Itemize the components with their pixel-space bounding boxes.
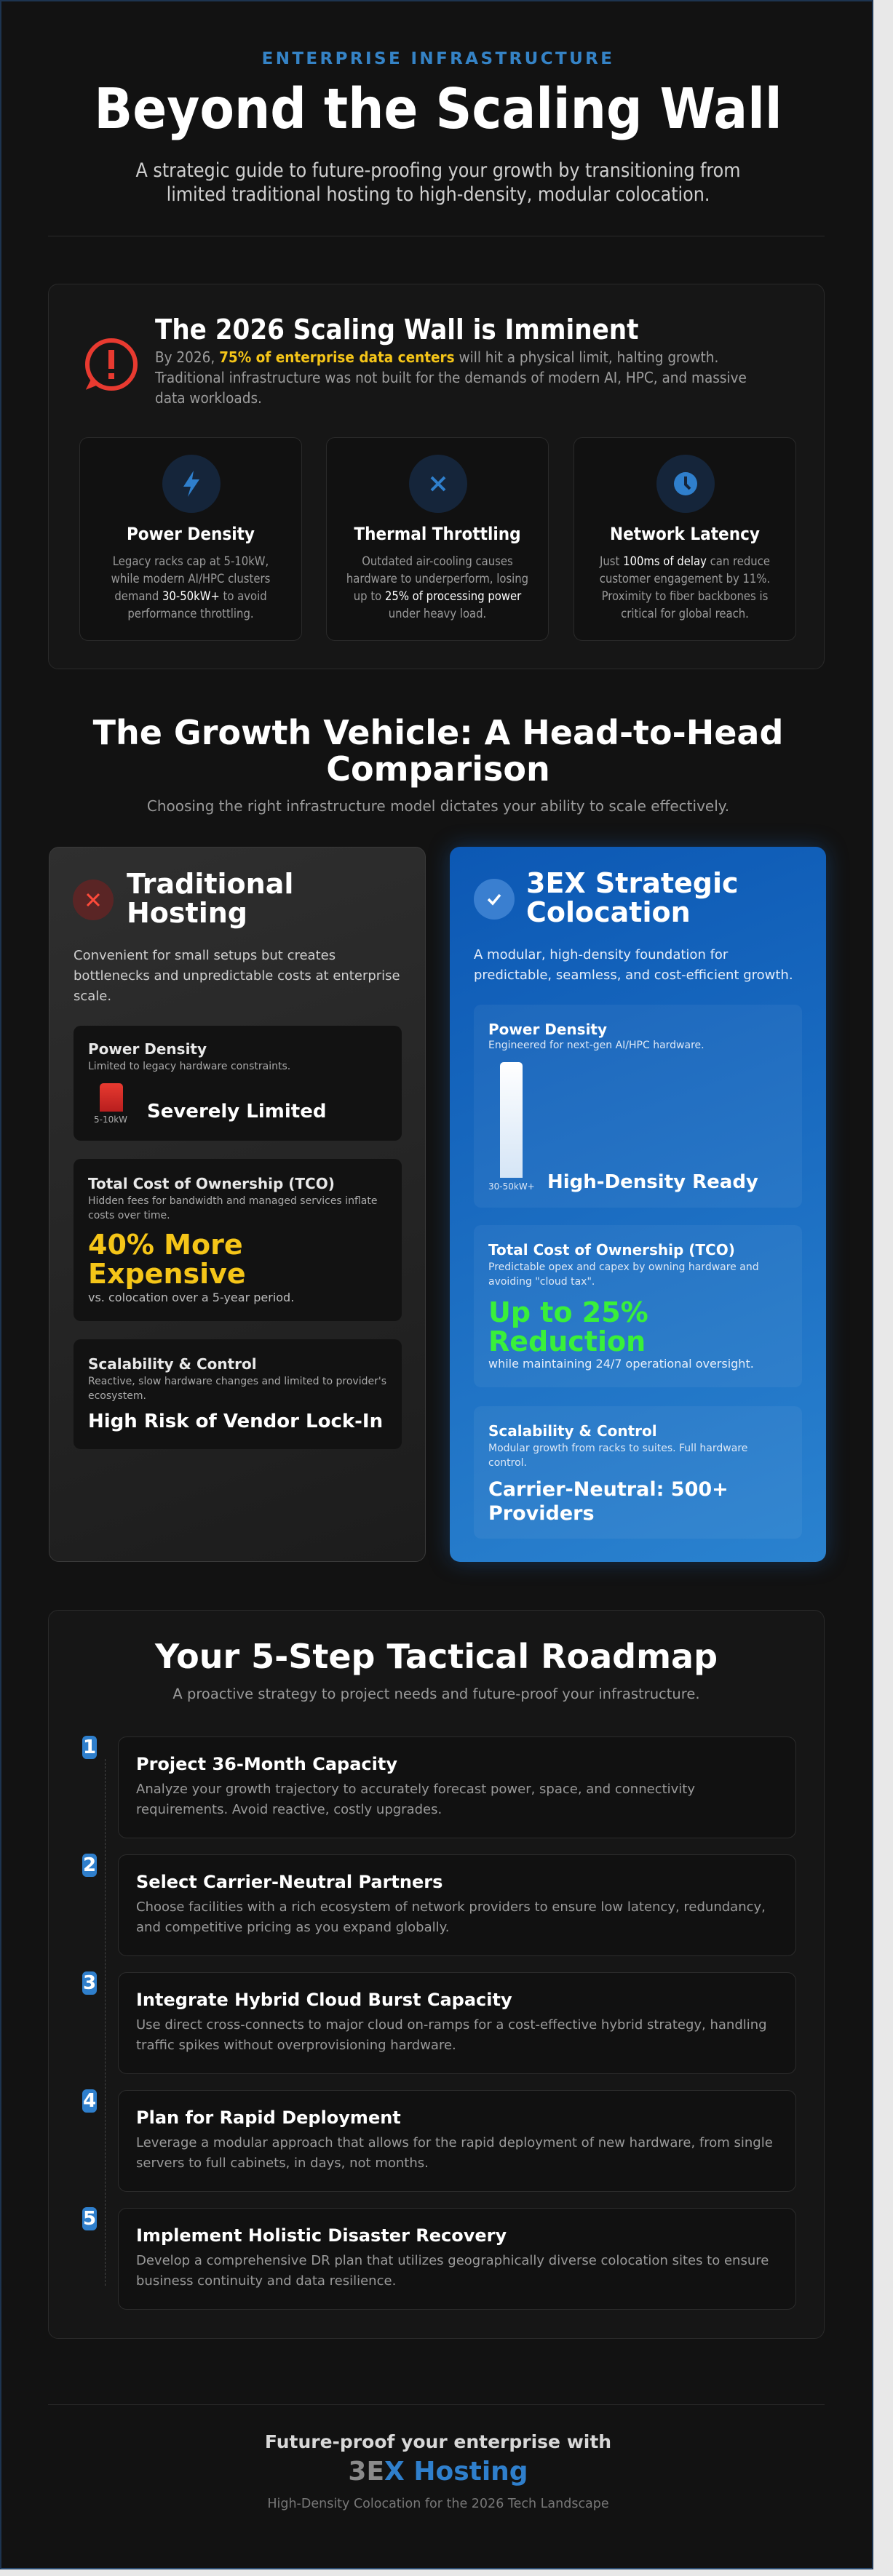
icon: warning <box>85 338 138 391</box>
box: scalability <box>74 1339 402 1449</box>
description: A modular, high-density foundation for predictable, seamless, and cost-efficient growth. <box>474 947 793 983</box>
box: power density: High-Density Ready <box>547 1171 758 1193</box>
card: thermal throttling: Thermal Throttling <box>354 524 521 544</box>
box: scalability: Carrier-Neutral: 500+ <box>488 1478 729 1501</box>
step 2 card <box>118 1854 796 1956</box>
card: network latency: Just 100ms of delay can reduce customer engagement by 11%. Proximity to fiber backbones is critical for global reach. <box>600 554 770 621</box>
step 3: 3 <box>83 1972 96 1994</box>
step 5 card: Implement Holistic Disaster Recovery <box>136 2225 507 2246</box>
roadmap subtitle: A proactive strategy to project needs and future-proof your infrastructure. <box>172 1686 700 1702</box>
icon: clock <box>656 455 715 513</box>
box: tco: Predictable opex and capex by owning hardware and avoiding "cloud tax". <box>488 1261 759 1288</box>
title: 3EX Strategic <box>526 867 739 899</box>
bar: 5-10kW <box>100 1083 123 1112</box>
box: scalability: Reactive, slow hardware changes and limited to provider's ecosystem. <box>88 1376 386 1402</box>
main title: Beyond the Scaling Wall <box>94 77 782 142</box>
box: tco: Hidden fees for bandwidth and managed services inflate costs over time. <box>88 1195 377 1221</box>
bar: 30-50kW+ <box>500 1062 523 1178</box>
step 5 card <box>118 2208 796 2310</box>
footer: Future-proof your enterprise with <box>265 2431 611 2452</box>
description: Convenient for small setups but creates bottlenecks and unpredictable costs at enterprise scale. <box>74 948 400 1004</box>
box: power density: 30-50kW+ <box>488 1181 535 1192</box>
icon: red x <box>73 880 114 920</box>
title: Colocation <box>526 896 691 928</box>
box: tco: Total Cost of Ownership (TCO) <box>88 1175 335 1192</box>
step 1 card: Project 36-Month Capacity <box>136 1754 397 1774</box>
footer: High-Density Colocation for the 2026 Tech Landscape <box>267 2497 609 2511</box>
step 4: 4 <box>83 2090 96 2112</box>
footer <box>265 2431 611 2511</box>
box: power density: Power Density <box>488 1021 607 1038</box>
box: power density: Engineered for next-gen AI/HPC hardware. <box>488 1040 705 1051</box>
box: power density: Severely Limited <box>147 1101 326 1122</box>
icon: bolt <box>162 455 221 513</box>
step 1 card <box>118 1736 796 1838</box>
subtitle: A strategic guide to future-proofing your growth by transitioning from <box>136 159 740 182</box>
comparison heading: The Growth Vehicle: A Head-to-Head <box>93 713 783 752</box>
comparison heading <box>93 713 783 789</box>
step 4 card <box>118 2090 796 2192</box>
box: tco <box>74 1159 402 1321</box>
panel: roadmap <box>48 1610 825 2339</box>
step 5 card: Develop a comprehensive DR plan that utilizes geographically diverse colocation sites to ensure business continuity and data resilience. <box>136 2253 769 2289</box>
step 1: 1 <box>83 1736 96 1758</box>
box: power density <box>474 1005 802 1208</box>
box: tco: 40% More <box>88 1229 243 1261</box>
title: Traditional <box>127 868 293 900</box>
card: thermal throttling <box>326 437 549 641</box>
card: network latency <box>573 437 796 641</box>
footer: 3EX Hosting <box>348 2457 528 2487</box>
box: power density <box>74 1026 402 1141</box>
roadmap heading: Your 5-Step Tactical Roadmap <box>155 1637 718 1676</box>
box: power density: 5-10kW <box>94 1114 127 1125</box>
card: power density: Legacy racks cap at 5-10kW, while modern AI/HPC clusters demand 30-50kW+ to avoid performance throttling. <box>111 554 270 621</box>
card: network latency: Network Latency <box>610 524 760 544</box>
box: tco: while maintaining 24/7 operational oversight. <box>488 1357 754 1371</box>
panel: traditional hosting <box>49 847 426 1562</box>
title <box>127 868 293 929</box>
eyebrow label: ENTERPRISE INFRASTRUCTURE <box>262 49 614 68</box>
subtitle <box>135 159 740 206</box>
box: scalability: High Risk of Vendor Lock-In <box>88 1411 383 1432</box>
box: tco: Total Cost of Ownership (TCO) <box>488 1241 735 1259</box>
step 3 card: Integrate Hybrid Cloud Burst Capacity <box>136 1990 512 2010</box>
box: scalability: Scalability & Control <box>488 1422 657 1440</box>
box: tco: Expensive <box>88 1258 246 1290</box>
step 3 card: Use direct cross-connects to major cloud on-ramps for a cost-effective hybrid strategy, handling traffic spikes without overprovisioning hardware. <box>136 2017 767 2053</box>
panel: scaling wall <box>48 284 825 669</box>
box: tco: Reduction <box>488 1325 646 1357</box>
step 2: 2 <box>83 1854 96 1876</box>
card: thermal throttling: Outdated air-cooling causes hardware to underperform, losing up to 25% of processing power under heavy load. <box>346 554 528 621</box>
box: tco <box>474 1225 802 1387</box>
step 1 card: Analyze your growth trajectory to accurately forecast power, space, and connectivity requirements. Avoid reactive, costly upgrades. <box>136 1782 695 1817</box>
box: power density: Limited to legacy hardware constraints. <box>88 1061 290 1072</box>
step 2 card: Select Carrier-Neutral Partners <box>136 1872 442 1892</box>
comparison subtitle: Choosing the right infrastructure model dictates your ability to scale effectively. <box>147 797 729 815</box>
step 2 card: Choose facilities with a rich ecosystem of network providers to ensure low latency, redundancy, and competitive pricing as you expand globally. <box>136 1899 766 1935</box>
panel: 3EX colocation <box>450 847 826 1562</box>
icon: x <box>409 455 467 513</box>
box: scalability <box>474 1406 802 1539</box>
box: scalability: Providers <box>488 1502 595 1525</box>
box: scalability: Scalability & Control <box>88 1355 257 1373</box>
card: power density <box>79 437 302 641</box>
box: tco: Up to 25% <box>488 1296 648 1328</box>
box: power density: Power Density <box>88 1040 207 1058</box>
box: tco: vs. colocation over a 5-year period. <box>88 1291 294 1304</box>
title: Hosting <box>127 897 247 929</box>
heading: The 2026 Scaling Wall is Imminent <box>155 314 638 346</box>
body text: By 2026, 75% of enterprise data centers will hit a physical limit, halting growth. Traditional infrastructure was not built for the demands of modern AI, HPC, and massive data workloads. <box>155 348 747 407</box>
step 5: 5 <box>83 2208 96 2230</box>
box: scalability: Modular growth from racks to suites. Full hardware control. <box>488 1443 747 1469</box>
icon: check <box>474 879 515 920</box>
step 4 card: Plan for Rapid Deployment <box>136 2108 401 2128</box>
comparison heading: Comparison <box>326 749 550 789</box>
step 3 card <box>118 1972 796 2074</box>
subtitle: limited traditional hosting to high-density, modular colocation. <box>167 183 710 206</box>
step 4 card: Leverage a modular approach that allows for the rapid deployment of new hardware, from single servers to full cabinets, in days, not months. <box>136 2135 773 2171</box>
title <box>526 867 739 928</box>
card: power density: Power Density <box>127 524 255 544</box>
